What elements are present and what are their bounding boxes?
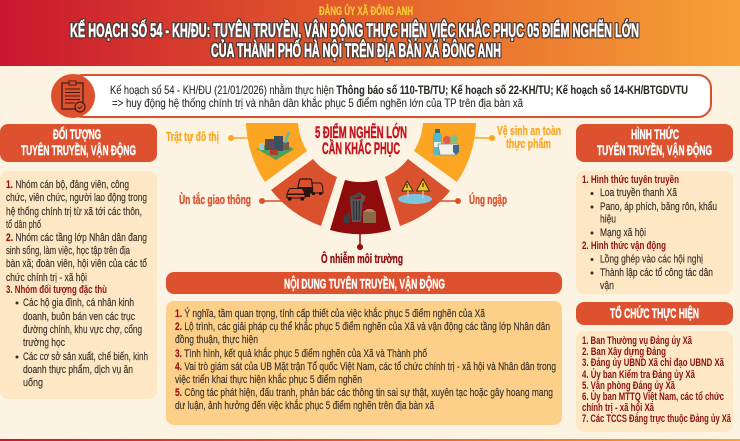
segment: environmental pollution	[321, 180, 403, 266]
text block: audience groups: bàn xã; đoàn viên, hội viên của các tổ	[6, 258, 147, 270]
text block: content items: việc triển khai thực hiện khắc phục 5 điểm nghẽn	[175, 373, 362, 386]
text block: forms list: Loa truyền thanh Xã	[600, 187, 678, 199]
heading: communication content: NỘI DUNG TUYÊN TRUYỀN, VẬN ĐỘNG	[284, 274, 445, 292]
icon: trash bin	[343, 192, 376, 223]
main title	[70, 20, 639, 62]
text block: content items: 5. Công tác phát hiện, đấu tranh, phản bác các thông tin sai sự thật, xuyên tạc hoặc gây hoang mang	[175, 387, 553, 399]
text block: audience groups: doanh thực phẩm, dịch vụ ăn	[23, 364, 133, 376]
info box	[51, 74, 711, 118]
plan summary text: => huy động hệ thống chính trị và nhân dân khắc phục 5 điểm nghẽn lớn của TP trên địa bàn xã	[112, 95, 523, 110]
text block: content items: 1. Ý nghĩa, tầm quan trọng, tính cấp thiết của việc khắc phục 5 điểm nghẽn của Xã	[175, 307, 486, 320]
text block: forms list: 2. Hình thức vận động	[582, 240, 666, 252]
heading: target audiences	[0, 124, 157, 162]
heading: five bottlenecks: 5 ĐIỂM NGHẼN LỚN	[315, 122, 407, 142]
text block: implementing bodies	[576, 331, 733, 432]
text block: content items: dư luận, ảnh hưởng đến việc khắc phục 5 điểm nghẽn trên địa bàn xã	[175, 399, 435, 412]
segment: urban order: Trật tự đô thị	[166, 129, 219, 144]
text block: audience groups: 2. Nhóm các tầng lớp Nhân dân đang	[6, 232, 147, 244]
text block: content items: 3. Tình hình, kết quả khắc phục 5 điểm nghẽn của Xã và Thành phố	[175, 347, 427, 360]
text block: implementing bodies: 2. Ban Xây dựng Đảng	[582, 346, 666, 358]
text block: audience groups: đường chính, khu vực chợ, cổng	[23, 324, 142, 336]
heading: implementation	[576, 302, 733, 325]
segment: food safety: thực phẩm	[506, 136, 551, 151]
text block: implementing bodies: chính trị - xã hội Xã	[582, 402, 655, 414]
icon: flood warning signs	[398, 179, 432, 204]
icon: city block	[257, 132, 294, 160]
segment: food safety	[414, 123, 561, 182]
icon: cars	[287, 179, 323, 200]
text block: audience groups: uống	[23, 377, 43, 389]
text block: audience groups: sinh sống, làm việc, học tập trên địa	[6, 245, 131, 257]
text block: audience groups: tổ dân phố	[6, 219, 41, 231]
plan summary text	[110, 82, 688, 110]
panel: communication content	[166, 272, 562, 425]
segment: environmental pollution: Ô nhiễm môi trường	[321, 251, 403, 266]
text block: audience groups: chức, viên chức, người lao động trong	[6, 192, 147, 204]
text block: forms list	[576, 171, 733, 294]
text block: forms list: Mạng xã hội	[600, 227, 646, 239]
text block: audience groups: trường học	[23, 337, 65, 349]
text block: content items: đồng thuận, thực hiện	[175, 334, 258, 346]
panel: target audiences	[0, 124, 157, 399]
segment: urban order	[166, 123, 307, 182]
text block: audience groups: 3. Nhóm đối tượng đặc thù	[6, 284, 107, 296]
segment: flooding: Úng ngập	[469, 192, 507, 207]
header banner	[0, 0, 740, 66]
icon: food basket and bottle	[433, 129, 459, 155]
text block: content items: 4. Vai trò giám sát của UB Mặt trận Tổ quốc Việt Nam, các tổ chức chính trị - xã hội và Nhân dân trong	[175, 361, 556, 373]
text block: forms list: vận	[600, 280, 614, 292]
heading: target audiences: TUYÊN TRUYỀN, VẬN ĐỘNG	[21, 141, 136, 158]
segment: food safety: Vệ sinh an toàn	[497, 123, 561, 138]
text block: content items	[166, 301, 562, 425]
text block: forms list: hiệu	[600, 214, 616, 226]
segment: flooding	[385, 159, 507, 226]
heading: target audiences: ĐỐI TƯỢNG	[53, 125, 101, 142]
text block: forms list: Lồng ghép vào các hội nghị	[600, 254, 703, 266]
icon: clipboard	[51, 74, 95, 118]
text block: audience groups: 1. Nhóm cán bộ, đảng viên, công	[6, 179, 129, 191]
organisation name: ĐẢNG ỦY XÃ ĐÔNG ANH	[319, 3, 413, 18]
text block: implementing bodies: 5. Văn phòng Đảng ủy Xã	[582, 380, 676, 392]
panel: implementation	[576, 302, 733, 432]
text block: audience groups: hệ thống chính trị từ xã tới các thôn,	[6, 206, 142, 218]
heading: communication forms	[576, 124, 733, 162]
main title: CỦA THÀNH PHỐ HÀ NỘI TRÊN ĐỊA BÀN XÃ ĐÔNG ANH	[211, 40, 501, 62]
text block: audience groups	[0, 171, 157, 399]
text block: implementing bodies: 1. Ban Thường vụ Đảng ủy Xã	[582, 335, 693, 347]
segment: traffic jam	[179, 159, 337, 226]
text block: audience groups: Các cơ sở sản xuất, chế biến, kinh	[23, 351, 148, 363]
segment: traffic jam: Ùn tắc giao thông	[179, 192, 251, 207]
text block: implementing bodies: 4. Ủy ban Kiểm tra Đảng ủy Xã	[582, 368, 696, 381]
text block: forms list: 1. Hình thức tuyên truyền	[582, 174, 679, 186]
heading: five bottlenecks	[315, 122, 407, 158]
heading: five bottlenecks: CẦN KHẮC PHỤC	[322, 139, 400, 158]
heading: communication forms: HÌNH THỨC	[631, 125, 679, 142]
text block: content items: 2. Lộ trình, các giải pháp cụ thể khắc phục 5 điểm nghẽn của Xã và vận động các tầng lớp Nhân dân	[175, 320, 550, 333]
text block: audience groups: Các hộ gia đình, cá nhân kinh	[23, 297, 134, 309]
text block: audience groups: doanh, buôn bán ven các trục	[23, 311, 135, 323]
heading: communication content	[166, 272, 562, 294]
text block: audience groups: chức chính trị - xã hội	[6, 272, 87, 284]
diagram: five bottlenecks	[166, 122, 561, 266]
panel: communication forms	[576, 124, 733, 294]
